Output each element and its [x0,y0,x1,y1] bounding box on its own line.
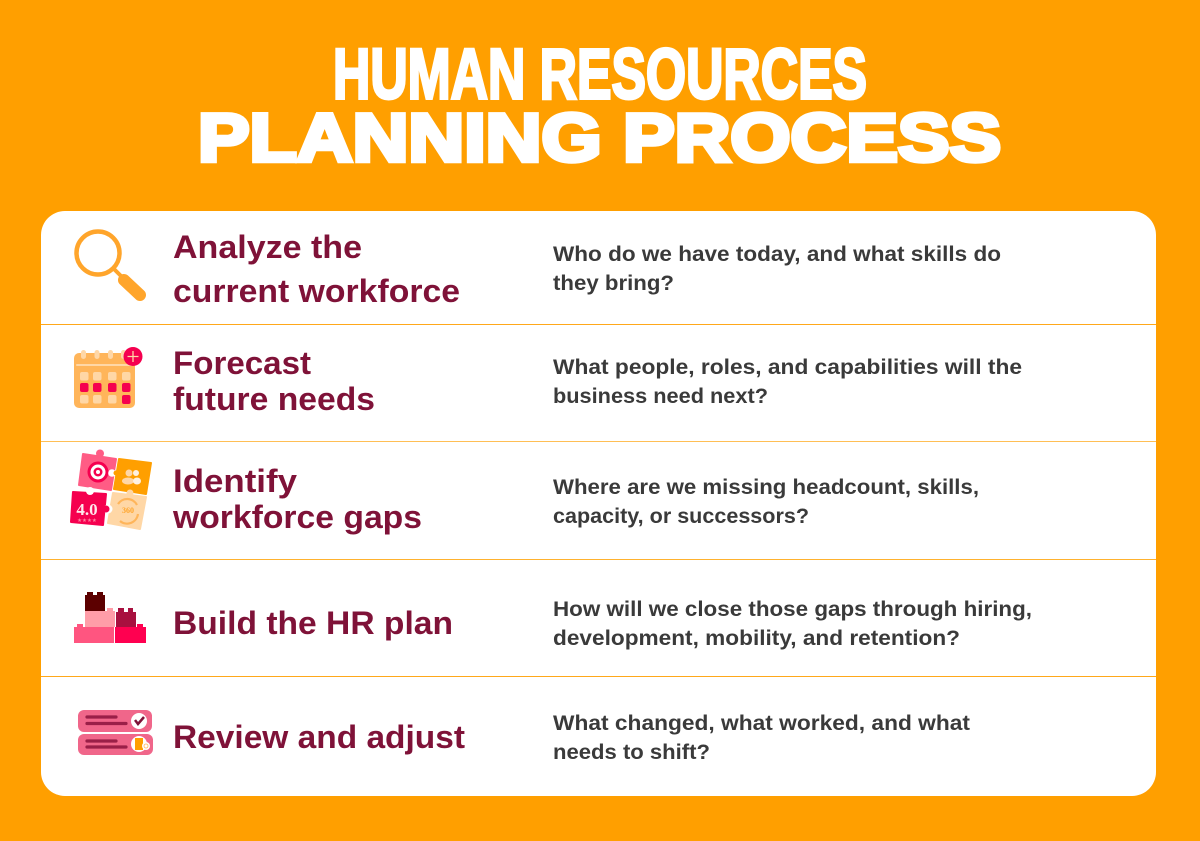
icon: calendar [74,347,142,408]
text: build question [553,598,1032,650]
heading: review: Review and adjust [173,719,465,755]
title: PLANNING PROCESS [198,100,1001,176]
title: HUMAN RESOURCES [333,36,867,114]
heading: forecast: Forecast [173,345,311,381]
heading: forecast [173,345,375,417]
title [198,36,1001,176]
icon: checklist [78,710,153,755]
icon: magnifying glass [76,232,140,295]
text: analyze question: Who do we have today, and what skills do [553,243,1001,266]
text: review question: needs to shift? [553,741,710,764]
text: analyze question [553,243,1001,295]
panel: process steps [41,211,1156,796]
text: build question: How will we close those gaps through hiring, [553,598,1032,621]
text: identify question: capacity, or successors? [553,505,809,528]
heading: identify [172,463,422,535]
heading: identify: Identify [173,463,297,499]
heading: identify: workforce gaps [172,499,422,535]
icon: building blocks [74,592,146,643]
text: review question [553,712,970,764]
icon: puzzle pieces [71,450,151,529]
text: forecast question: What people, roles, and capabilities will the [553,356,1022,379]
icon: puzzle pieces: 360 [122,506,134,515]
text: build question: development, mobility, and retention? [553,627,960,650]
heading: build: Build the HR plan [173,605,453,641]
text: forecast question [553,356,1022,408]
text: forecast question: business need next? [553,385,768,408]
text: identify question: Where are we missing headcount, skills, [553,476,979,499]
heading: analyze: current workforce [173,273,460,309]
icon: puzzle pieces: ★★★★ [77,517,97,524]
heading: forecast: future needs [173,381,375,417]
heading: analyze: Analyze the [173,229,362,265]
heading: analyze [173,229,460,309]
text: analyze question: they bring? [553,272,674,295]
text: review question: What changed, what worked, and what [553,712,970,735]
icon: puzzle pieces: 4.0 [76,500,98,519]
text: identify question [553,476,979,528]
